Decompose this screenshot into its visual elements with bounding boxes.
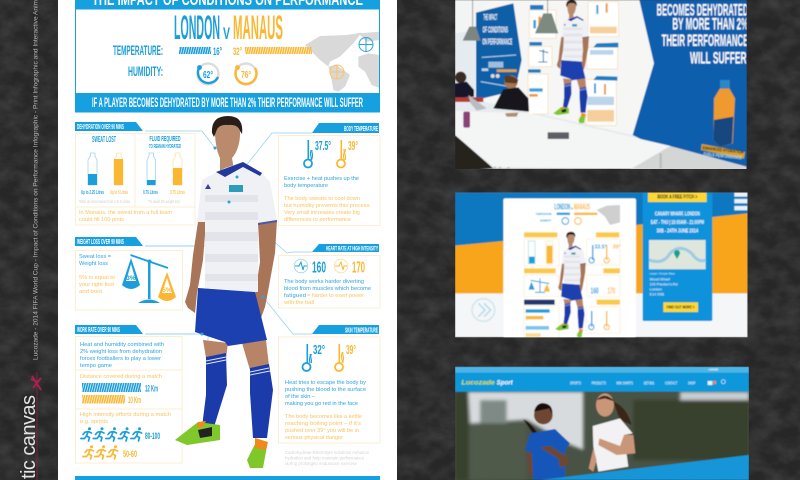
skin temperature text: making you go red in the face xyxy=(285,401,358,407)
sweat lost column: *Men do most sweat from 2 to 5 Litres xyxy=(79,199,130,204)
body temperature text: but humidity prevents this process. xyxy=(284,203,371,209)
tab heading: DEHYDRATION OVER 90 MINS xyxy=(77,124,124,131)
thermometer: 39: 39° xyxy=(346,342,356,357)
boots xyxy=(175,422,220,445)
icon: balance scale xyxy=(122,255,176,303)
white infographic page: MANAUS xyxy=(574,201,590,211)
sprint counts: e.g. sprints xyxy=(80,419,108,425)
panel: heart rate at high intensity xyxy=(278,244,380,308)
work rate summary: Heat and humidity combined with xyxy=(80,342,164,348)
table and floor xyxy=(455,111,747,170)
distance bars: 12 Km xyxy=(145,384,158,394)
white infographic page: TEMPERATURE xyxy=(536,212,552,216)
photo: wall installation xyxy=(455,0,748,170)
socks xyxy=(202,353,227,427)
poster footer band xyxy=(75,476,380,480)
weight loss text: 5% is equal to xyxy=(79,275,115,281)
map marker: London xyxy=(359,38,373,52)
infographic poster: BODY TEMPERATURE xyxy=(344,126,378,133)
navigation bar xyxy=(455,367,749,392)
map marker: Manaus xyxy=(330,65,344,79)
poster title band xyxy=(75,0,380,9)
humidity row: 62° xyxy=(203,70,213,81)
thermometer: 39: 39° xyxy=(348,138,358,153)
social share buttons xyxy=(734,192,748,210)
temperature row: TEMPERATURE: xyxy=(113,42,163,58)
shorts xyxy=(195,288,267,346)
navigation bar: Sport xyxy=(497,381,514,387)
skin temperature text: The body becomes like a kettle xyxy=(285,414,362,420)
footballer figure xyxy=(175,116,277,468)
weight loss text: Weight loss xyxy=(79,261,108,267)
panel: work rate over 90 mins xyxy=(75,325,195,463)
sprint counts: 50-60 xyxy=(123,449,137,460)
navigation bar: WIN SHIRTS xyxy=(616,380,633,385)
headline banner xyxy=(75,93,380,112)
fluid required column: TO REMAIN HYDRATED xyxy=(149,144,181,150)
logo: artistic canvas: tic canvas xyxy=(18,395,40,479)
head xyxy=(215,120,240,172)
left blue hexagon: OF CONDITIONS xyxy=(483,25,508,34)
skin temperature text: of the skin – xyxy=(285,394,316,400)
right blue panel xyxy=(633,0,748,170)
vertical project caption: Lucozade - 2014 FIFA World Cup - Impact of Conditions on Performance Infographic - Print Infographic and Interactive Anim xyxy=(32,0,40,360)
fluid required column xyxy=(143,134,185,204)
right blue panel: FUELS PERFORMANCE xyxy=(703,151,742,160)
shirt xyxy=(197,162,277,292)
right blue panel: ENHANCED HYDRATION xyxy=(702,145,744,155)
blue booking panel: 30B - 24TH JUNE 2014 xyxy=(656,229,698,235)
body temperature text: body temperature xyxy=(284,183,328,189)
skin temperature text: pushing the blood to the surface xyxy=(285,387,366,393)
heart rate text: fatigued xyxy=(284,293,306,299)
body temperature text xyxy=(284,176,371,223)
footnote: during prolonged endurance exercise xyxy=(285,461,357,467)
fluid required column: FLUID REQUIRED xyxy=(150,134,181,143)
photo: Lucozade Sport website xyxy=(455,367,749,480)
left blue hexagon: THE IMPACT xyxy=(483,13,497,22)
humidity row: HUMIDITY: xyxy=(128,63,163,79)
lamps xyxy=(463,0,558,41)
blue booking panel: SAT - THU | 10:00AM - 21:00PM xyxy=(651,220,704,226)
body temperature text: differences to performance xyxy=(284,217,351,223)
white infographic page: LONDON xyxy=(554,201,570,211)
sprint counts: 80-100 xyxy=(145,431,160,442)
fluid required column: 3.75 Litres xyxy=(170,190,185,196)
panel: skin temperature xyxy=(278,325,380,443)
white infographic page xyxy=(503,198,636,338)
infographic poster: SKIN TEMPERATURE xyxy=(345,328,378,334)
navigation bar: PRODUCTS xyxy=(592,380,606,385)
heart rate text: = harder to exert power xyxy=(307,293,364,299)
blue booking panel: London xyxy=(650,287,662,291)
right blue panel: WILL SUFFER xyxy=(690,48,747,67)
poster sheet xyxy=(58,0,397,480)
blue booking panel: CANARY WHARF, LONDON xyxy=(655,211,700,217)
blue booking panel: 100 Preston's Rd xyxy=(650,282,678,286)
leader lines from panels to player xyxy=(145,131,312,427)
white infographic page: 39° xyxy=(613,244,621,250)
fluid required column: *To avoid 2% weight loss xyxy=(148,199,180,204)
navigation bar: SHOP xyxy=(688,380,695,385)
infographic poster xyxy=(58,0,397,480)
sweat lost column: Up to 2.25 Litres xyxy=(81,190,104,196)
thermometer: 37.5: 37.5° xyxy=(315,138,331,153)
panel: heart rate at high intensity: 170 xyxy=(352,260,365,276)
body temperature text: Exercise + heat pushes up the xyxy=(284,176,359,182)
white infographic page: v xyxy=(571,205,574,210)
skin temperature text: reaching boiling point – if it's xyxy=(285,421,361,427)
Lucozade bottle xyxy=(713,80,735,147)
panel: London v Manaus comparison: MANAUS xyxy=(233,9,283,47)
panel: London v Manaus comparison xyxy=(75,9,380,112)
wall panels xyxy=(528,2,619,125)
infographic portfolio page: IF A PLAYER BECOMES DEHYDRATED BY MORE THAN 2% THEIR PERFORMANCE WILL SUFFER xyxy=(92,94,363,110)
distance bars: 10 Km xyxy=(128,395,141,406)
temperature row: 16° xyxy=(213,46,222,58)
heading: London v Manaus: V xyxy=(223,24,230,43)
distance bars: Distance covered during a match xyxy=(80,374,162,380)
photo: booking web page xyxy=(455,192,748,338)
distance bars xyxy=(80,374,162,406)
people at the table xyxy=(455,72,529,117)
blue booking panel: FIND OUT MORE > xyxy=(667,305,695,310)
humidity row xyxy=(128,63,256,84)
runner in blue xyxy=(523,403,570,480)
navigation bar: CONTACT xyxy=(665,380,677,385)
humidity row: 76° xyxy=(241,70,251,81)
temperature row xyxy=(113,42,312,58)
body temperature text: The body sweats to cool down xyxy=(284,196,360,202)
footnote: Carbohydrate-Electrolyte solutions enhance xyxy=(285,450,369,456)
skin temperature text xyxy=(285,380,366,441)
left blue hexagon: ON PERFORMANCE xyxy=(482,38,513,47)
blue booking panel xyxy=(643,192,712,321)
leader dots xyxy=(200,146,264,336)
skin temperature text: pushed over 39° you will be in xyxy=(285,428,359,434)
left blue hexagon xyxy=(476,3,522,100)
sprint counts xyxy=(80,412,171,460)
sweat lost column xyxy=(79,135,130,204)
panel: dehydration over 90 mins xyxy=(75,122,195,225)
thermometer: 32: 32° xyxy=(313,342,325,357)
footnote: hydration and help maintain performance xyxy=(285,456,364,462)
world map xyxy=(305,32,380,92)
navigation bar: GET-BIG xyxy=(644,380,655,385)
sweat lost column: SWEAT LOST xyxy=(92,135,116,144)
heart rate text: with the ball xyxy=(283,300,314,306)
blue booking panel: BOOK A FREE PITCH > xyxy=(657,195,697,201)
navigation bar: Lucozade xyxy=(461,381,495,387)
icon: balance scale: 5% xyxy=(162,287,172,294)
skin temperature text: serious physical danger xyxy=(285,435,343,441)
white infographic page: HUMIDITY xyxy=(540,219,551,223)
white infographic page: 160 xyxy=(591,287,599,296)
navigation bar: SPORTS xyxy=(570,380,581,385)
heading: London v Manaus: LONDON xyxy=(174,9,220,47)
work rate summary: tempo game xyxy=(80,363,112,369)
runner in white xyxy=(589,393,635,472)
white infographic page: 170 xyxy=(607,287,616,296)
heart rate text: The body works harder diverting xyxy=(284,279,364,285)
heart rate text: blood from muscles which become xyxy=(284,286,371,292)
sprint counts: High intensity efforts during a match xyxy=(80,412,171,418)
panel: weight loss over 90 mins xyxy=(75,237,195,310)
running photo xyxy=(455,392,749,480)
fluid required column: 0.75 Litres xyxy=(143,190,158,196)
tab heading: HEART RATE AT HIGH INTENSITY xyxy=(326,246,378,252)
heart rate: 160: 160 xyxy=(312,260,326,276)
tab heading: WEIGHT LOSS OVER 90 MINS xyxy=(77,239,124,246)
work rate summary: forces footballers to play a lower xyxy=(80,356,161,362)
weight loss text: your right foot xyxy=(79,282,114,288)
panel: body temperature xyxy=(278,123,380,226)
work rate summary: 2% weight loss from dehydration xyxy=(80,349,162,355)
Manaus sweat note: In Manaus, the sweat from a full team xyxy=(79,210,172,216)
Manaus sweat note: could fill 100 pints xyxy=(79,217,124,223)
temperature row: 32° xyxy=(233,46,242,58)
sweat lost column: Up to 5 Litres xyxy=(110,190,128,196)
tab heading: WORK RATE OVER 90 MINS xyxy=(77,327,120,334)
weight loss text: and boot xyxy=(79,289,102,295)
blue booking panel: E14 9SB xyxy=(650,292,665,296)
arms and legs xyxy=(185,222,206,313)
white infographic page: 33.5° xyxy=(594,244,607,250)
weight loss text: Sweat loss = xyxy=(79,254,112,260)
body temperature text: Very small increases create big xyxy=(284,210,360,216)
weight loss text xyxy=(79,254,115,295)
blue booking panel: Wood Wharf xyxy=(650,277,671,281)
navigation bar: LOGIN xyxy=(709,368,718,372)
icon: balance scale: 3% xyxy=(126,275,136,282)
skin temperature text: Heat tries to escape the body by xyxy=(285,380,366,386)
blue booking panel: Larger / Google Maps xyxy=(650,272,676,275)
